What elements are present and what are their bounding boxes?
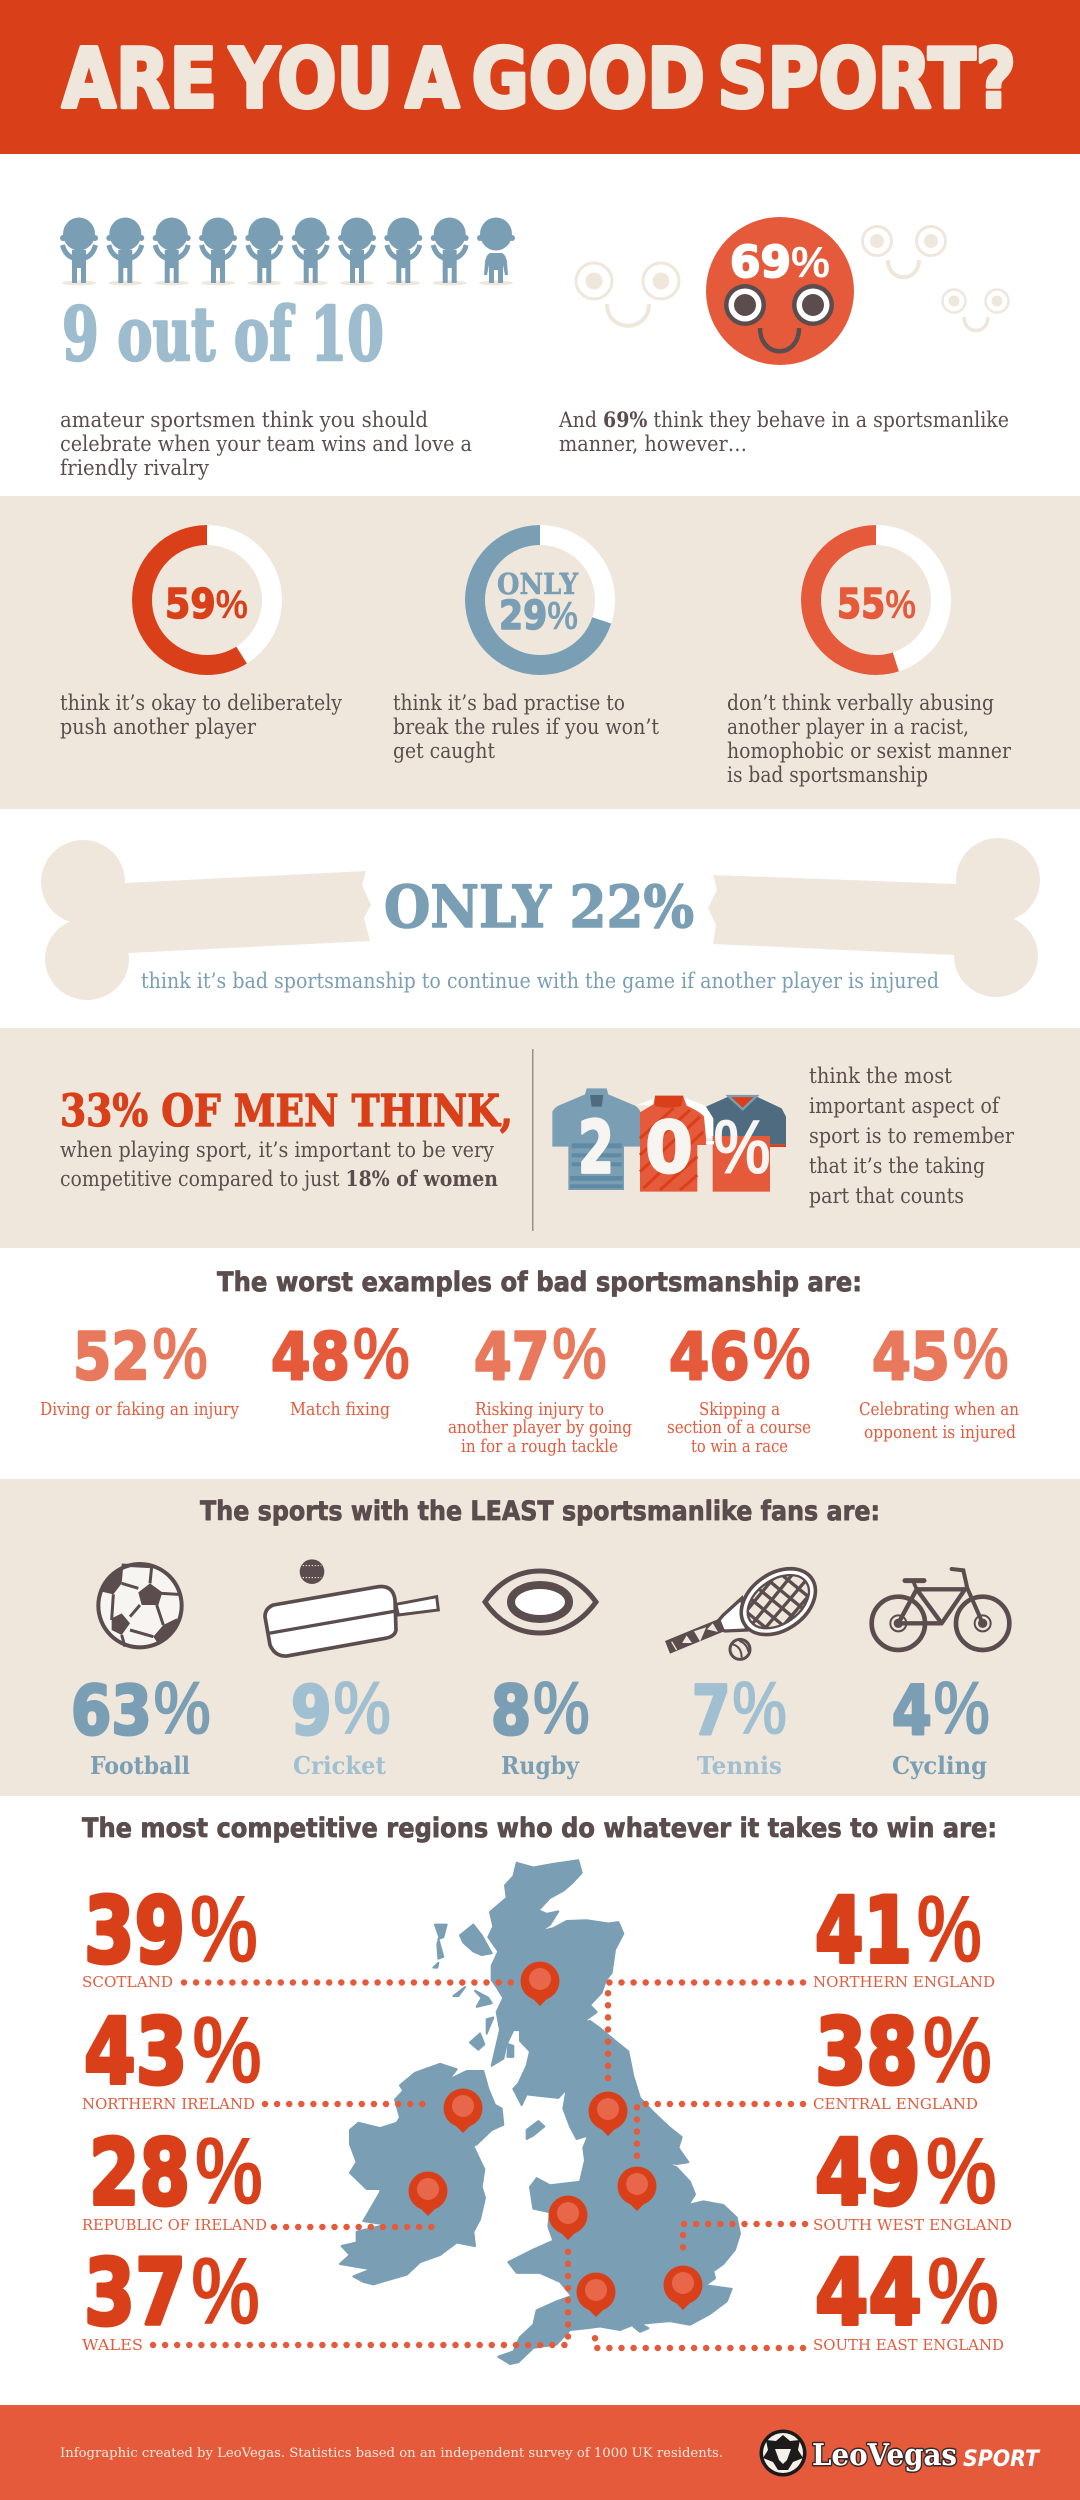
stat: South West England 49%: SOUTH WEST ENGLAND — [813, 2216, 1012, 2234]
map pins — [408, 1962, 702, 2317]
stat: Central England 38%: 38% — [815, 1997, 992, 2105]
panel: men vs women and 20% — [0, 1028, 1080, 1248]
icon: lion logo — [760, 2430, 806, 2476]
stat: Republic of Ireland 28%: 28% — [89, 2118, 263, 2226]
stat: cricket 9% — [291, 1666, 391, 1780]
logo: LeoVegas Sport: SPORT — [963, 2447, 1041, 2472]
icon: main smiley with 69%: 69% — [730, 237, 830, 288]
stat: tennis 7%: 7% — [692, 1666, 787, 1751]
icon: bone left half — [41, 840, 371, 1000]
stat: rugby 8%: Rugby — [501, 1751, 580, 1780]
stat: Northern Ireland 43%: 43% — [84, 1997, 262, 2105]
stat: South East England 44%: 44% — [815, 2238, 999, 2346]
stat: rugby 8%: 8% — [491, 1666, 590, 1751]
icon: three jerseys with 20% — [552, 1088, 786, 1192]
caption: 29%: think it’s bad practise to — [393, 691, 625, 715]
stat: tennis 7% — [692, 1666, 787, 1780]
stat: 52% diving: 52% — [73, 1312, 208, 1395]
caption: 55%: don’t think verbally abusing — [727, 691, 994, 715]
donut: 55%: 55% — [837, 580, 916, 628]
stat: 46% skipping: 46% — [669, 1312, 811, 1395]
text block: amateur sportsmen — [60, 408, 472, 480]
stat: 45% celebrating: opponent is injured — [864, 1422, 1016, 1443]
stat: cycling 4%: Cycling — [892, 1751, 987, 1780]
stat: cycling 4%: 4% — [892, 1666, 990, 1751]
stat: 46% skipping: section of a course — [667, 1417, 811, 1438]
stat: 48% match fixing: 48% — [271, 1312, 410, 1395]
panel: least sportsmanlike fans — [0, 1479, 1080, 1796]
icon: ten people — [60, 218, 515, 286]
stat: 47% rough tackle — [448, 1312, 632, 1457]
text block: taking part: that it’s the taking — [809, 1154, 985, 1178]
stat: South West England 49%: 49% — [815, 2118, 997, 2226]
text block: taking part: sport is to remember — [809, 1124, 1015, 1148]
stat: 47% rough tackle: in for a rough tackle — [461, 1436, 618, 1457]
panel: broken bone — [41, 838, 1040, 1000]
icon: three jerseys with 20%: 2 — [578, 1106, 614, 1190]
donut: 59%: 59% — [165, 580, 248, 628]
heading: competitive regions: The most competitive regions who do whatever it takes to win are: — [82, 1813, 997, 1844]
map: UK and Ireland — [340, 1860, 740, 2364]
icon: main smiley with 69% — [706, 217, 854, 365]
stat: Scotland 39%: SCOTLAND — [82, 1973, 173, 1991]
panel: competitive regions — [82, 1813, 1012, 2364]
icon: small smiley top right — [862, 226, 946, 277]
icon: three jerseys with 20%: 0 — [645, 1106, 693, 1189]
stat: rugby 8% — [491, 1666, 590, 1780]
panel: donut stats — [0, 496, 1080, 809]
text block: 69% sportsmanlike: And 69% think they behave in a sportsmanlike — [558, 407, 1009, 432]
caption: 55%: is bad sportsmanship — [727, 763, 928, 787]
stat: cycling 4% — [892, 1666, 990, 1780]
text block: 69% sportsmanlike: manner, however… — [559, 432, 747, 456]
text block: amateur sportsmen: celebrate when your team wins and love a — [60, 432, 472, 456]
caption: 59%: push another player — [60, 715, 257, 739]
stat: 48% match fixing: Match fixing — [290, 1399, 390, 1420]
stat: cricket 9%: 9% — [291, 1666, 391, 1751]
caption: 55%: homophobic or sexist manner — [727, 739, 1012, 763]
stat: Northern Ireland 43%: NORTHERN IRELAND — [82, 2095, 255, 2113]
stat: 47% rough tackle: 47% — [474, 1312, 607, 1395]
caption: 29%: break the rules if you won’t — [393, 715, 660, 739]
icon: three jerseys with 20%: % — [713, 1105, 771, 1191]
panel: 69% smiley — [558, 217, 1009, 456]
icon: cricket bat and ball — [265, 1559, 438, 1656]
stat: only 22%: ONLY 22% — [384, 873, 694, 941]
text block: taking part: think the most — [809, 1064, 953, 1088]
text block: taking part — [809, 1064, 1015, 1208]
text block: competitive — [60, 1138, 498, 1191]
icon: bone right half — [708, 838, 1040, 997]
caption: 59%: think it’s okay to deliberately — [60, 691, 342, 715]
caption: bad sportsmanship injured: think it’s bad sportsmanship to continue with the game if another player is injured — [141, 969, 939, 993]
text block: taking part: part that counts — [809, 1184, 964, 1208]
logo: LeoVegas Sport: LeoVegas — [812, 2438, 957, 2473]
caption: 55% — [727, 691, 1012, 787]
logo: LeoVegas Sport — [812, 2438, 1041, 2473]
stat: Northern England 41%: NORTHERN ENGLAND — [813, 1973, 995, 1991]
stat: Scotland 39%: 39% — [84, 1876, 258, 1984]
stat: 46% skipping: to win a race — [691, 1436, 788, 1457]
text block: amateur sportsmen: friendly rivalry — [60, 456, 209, 480]
caption: 29% — [393, 691, 660, 763]
stat: 46% skipping — [667, 1312, 811, 1457]
stat: Northern England 41%: 41% — [815, 1876, 982, 1984]
donut: 55% — [811, 535, 941, 665]
stat: tennis 7%: Tennis — [697, 1751, 782, 1780]
big stat: 9 out of 10: 9 out of 10 — [62, 292, 384, 378]
stat: 45% celebrating: 45% — [872, 1312, 1009, 1395]
dotted connector lines — [153, 1982, 805, 2348]
donut: only 29%: 29% — [499, 593, 578, 639]
credit text: Infographic created by LeoVegas. Statistics based on an independent survey of 1000 UK residents. — [60, 2446, 723, 2461]
icon: small smiley lower right — [942, 290, 1008, 330]
stat: Central England 38%: CENTRAL ENGLAND — [813, 2095, 978, 2113]
text block: taking part: important aspect of — [809, 1094, 1001, 1118]
text block: competitive: when playing sport, it’s important to be very — [60, 1138, 494, 1162]
stat: 45% celebrating — [859, 1312, 1019, 1443]
text block: amateur sportsmen: amateur sportsmen think you should — [60, 408, 428, 432]
donut: only 29%: ONLY — [497, 567, 578, 601]
panel: header — [0, 0, 1080, 154]
donut: only 29% — [475, 535, 605, 665]
heading: worst examples: The worst examples of bad sportsmanship are: — [217, 1267, 862, 1298]
panel: worst examples — [40, 1267, 1019, 1457]
stat: 52% diving — [40, 1312, 240, 1420]
icon: small smiley left — [576, 263, 679, 326]
caption: 55%: another player in a racist, — [727, 715, 969, 739]
stat: Wales 37%: WALES — [82, 2336, 143, 2354]
stat: 47% rough tackle: Risking injury to — [475, 1399, 604, 1420]
stat: football 63%: Football — [90, 1751, 190, 1780]
stat: 46% skipping: Skipping a — [699, 1399, 780, 1420]
caption: 29%: get caught — [393, 739, 495, 763]
heading: 33% of men think: 33% OF MEN THINK, — [60, 1086, 513, 1137]
stat: cricket 9%: Cricket — [293, 1751, 386, 1780]
icon: bicycle — [872, 1569, 1009, 1650]
stat: Republic of Ireland 28%: REPUBLIC OF IRELAND — [82, 2216, 267, 2234]
stat: South East England 44%: SOUTH EAST ENGLAND — [813, 2336, 1004, 2354]
stat: 47% rough tackle: another player by going — [448, 1417, 632, 1438]
icon: rugby ball — [485, 1571, 596, 1633]
stat: 52% diving: Diving or faking an injury — [40, 1399, 240, 1420]
stat: Wales 37%: 37% — [84, 2238, 260, 2346]
caption: 59% — [60, 691, 342, 739]
donut: 59% — [142, 535, 272, 665]
panel: 9 out of 10 — [60, 218, 515, 480]
stat: 45% celebrating: Celebrating when an — [859, 1399, 1019, 1420]
stat: football 63%: 63% — [71, 1666, 211, 1751]
text block: 69% sportsmanlike — [558, 407, 1009, 456]
panel: footer — [0, 2405, 1080, 2500]
text block: competitive: competitive compared to just 18% of women — [60, 1166, 498, 1191]
icon: tennis racket and ball — [665, 1566, 818, 1661]
icon: football — [98, 1564, 182, 1647]
heading: least sportsmanlike: The sports with the LEAST sportsmanlike fans are: — [200, 1496, 880, 1527]
